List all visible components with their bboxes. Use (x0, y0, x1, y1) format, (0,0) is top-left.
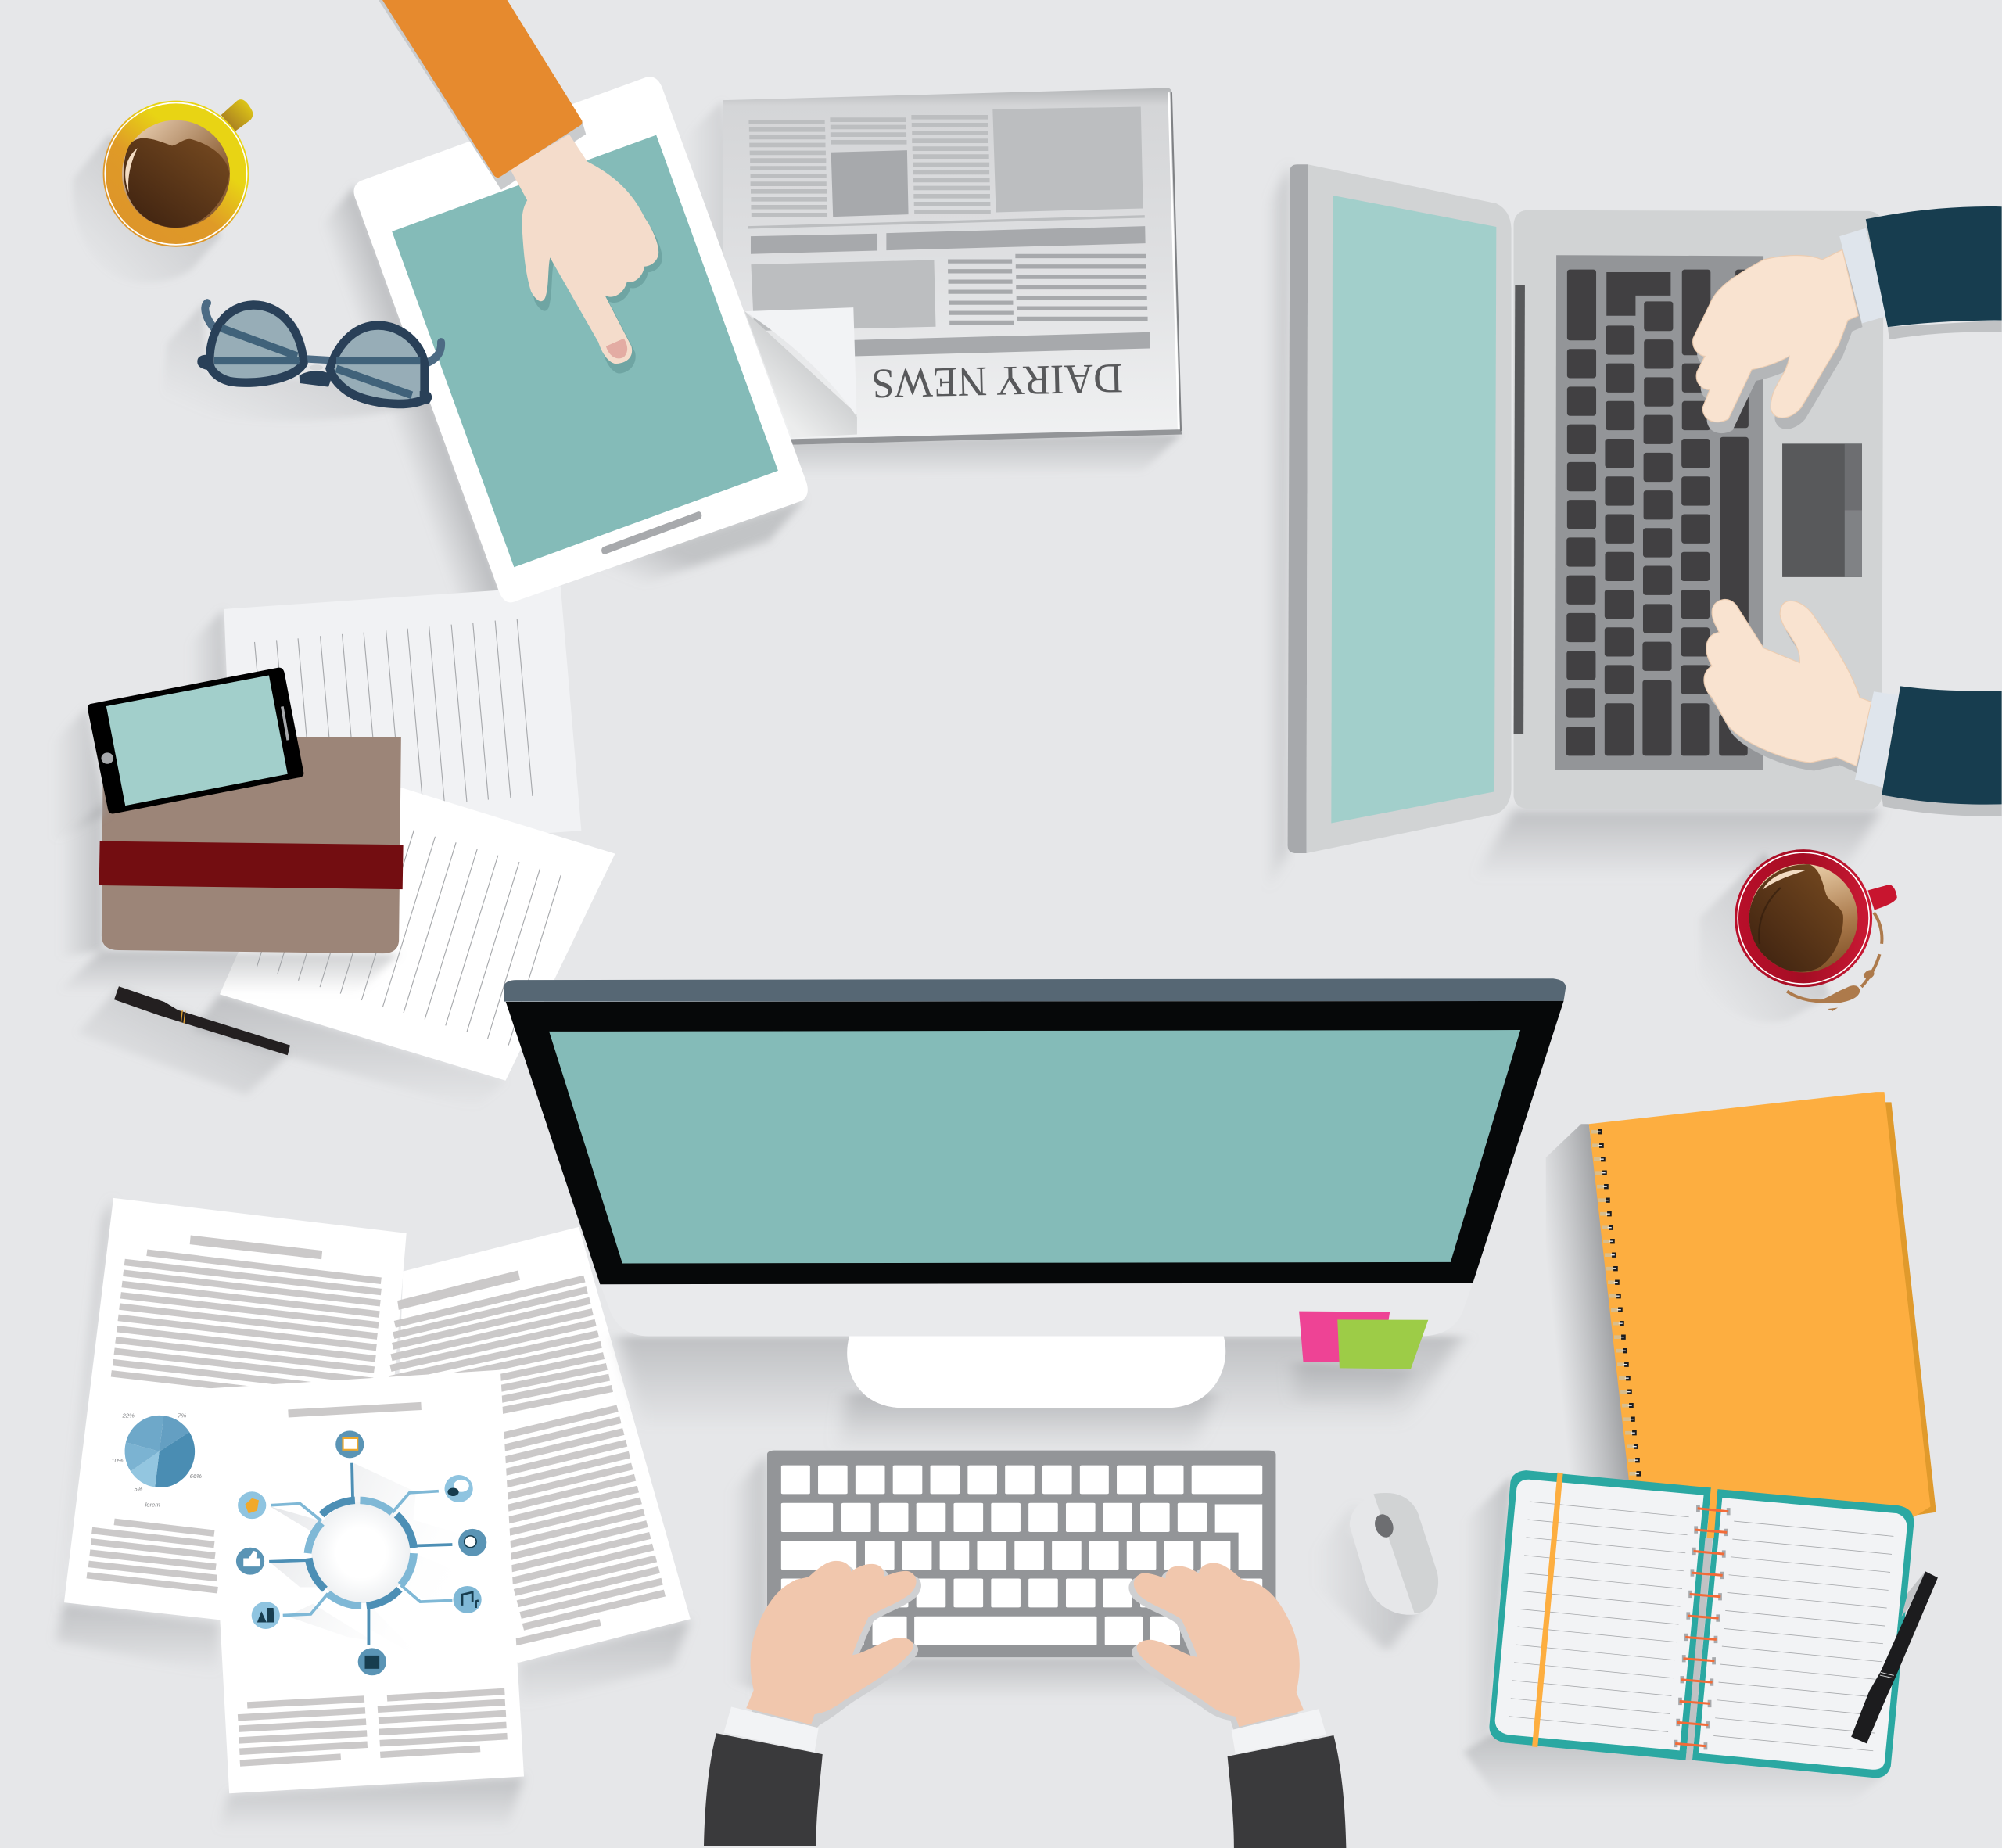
keyboard tray (1555, 255, 1763, 770)
bottom hand (1704, 600, 1871, 766)
red coffee cup (1699, 849, 1897, 1022)
photo lower (751, 260, 936, 331)
left hand (746, 1561, 917, 1724)
top hand (1693, 249, 1858, 422)
icon: thumbs up (243, 1551, 260, 1566)
chart sheet shadow (217, 1776, 524, 1832)
pie labels: 66% (190, 1473, 202, 1480)
pie slice 10% (125, 1442, 160, 1471)
open ring notebook with pen (1464, 1470, 1938, 1804)
pie labels: 10% (111, 1457, 124, 1464)
rule (748, 217, 1145, 228)
sleeve shadow (379, 0, 586, 190)
mouse left half (1350, 1493, 1438, 1615)
bottom sleeve (1882, 686, 2002, 805)
headline bars (751, 226, 1146, 254)
crema highlight (122, 120, 230, 228)
laptop keys (1566, 270, 1749, 755)
top hand shadow (1697, 261, 1863, 433)
monitor stand (847, 1336, 1225, 1408)
hand shadow (514, 140, 662, 374)
article columns (748, 117, 991, 215)
folded corner top (744, 307, 856, 417)
left page (1495, 1480, 1704, 1750)
chin shadow (618, 1336, 1462, 1431)
chart sheet right column (378, 1692, 508, 1755)
document sheets with charts (56, 1198, 691, 1832)
icon: speech dark (447, 1487, 459, 1496)
laptop with typing hands (1267, 164, 2002, 893)
notebook shadow bottom (59, 950, 399, 994)
upper sheet lines (255, 619, 533, 819)
second sheet heading (397, 1271, 520, 1310)
hub (311, 1502, 411, 1603)
keys (781, 1466, 1262, 1645)
spine (1686, 1538, 1713, 1760)
base shadow (1473, 809, 1882, 879)
tablet body (354, 77, 808, 602)
phone shadow (52, 707, 106, 842)
folded corner underside (744, 311, 857, 438)
pen ring (181, 1010, 185, 1023)
cup handle (1867, 885, 1897, 910)
binding holes (1598, 1132, 1641, 1473)
pen shadow (1902, 1572, 1926, 1617)
right temple tip (425, 343, 441, 364)
phone body (88, 668, 303, 813)
chart sheet (208, 1370, 524, 1793)
home bar (605, 515, 698, 551)
orange sleeve (382, 0, 582, 178)
top bezel band (504, 978, 1566, 1002)
coffee stain ring (1787, 913, 1882, 1001)
chart sheet heading (288, 1402, 422, 1417)
right page lines (1713, 1521, 1893, 1751)
desktop monitor (504, 978, 1566, 1453)
top sleeve (1866, 206, 2002, 327)
elastic band (1532, 1473, 1563, 1747)
sheet shadow bottom (56, 1602, 218, 1674)
light connectors (271, 1491, 452, 1616)
left temple tip (205, 303, 215, 329)
newspaper sheet (723, 88, 1182, 445)
icon: puzzle (245, 1498, 259, 1513)
notebook shadow bottom (1464, 1734, 1885, 1804)
newspaper edge (790, 429, 1182, 445)
dark connectors (269, 1463, 452, 1645)
laptop screen (1331, 196, 1496, 824)
phone speaker (282, 706, 288, 740)
text sheet heading (190, 1236, 322, 1259)
phone button (101, 752, 113, 764)
laptop base (1514, 210, 1884, 809)
pen shadow (77, 987, 290, 1095)
binding loops tan (1591, 1132, 1636, 1473)
upper sheet shadow (188, 609, 230, 777)
right hand (1134, 1563, 1304, 1727)
pie slice 5% (131, 1451, 160, 1487)
pen band (1880, 1672, 1894, 1678)
coffee stain blobs (1817, 970, 1874, 1011)
yellow coffee cup (73, 99, 253, 282)
lower sheet lines (257, 797, 561, 1046)
pie labels: 22% (122, 1412, 135, 1419)
scroll wheel (1373, 1514, 1395, 1538)
temples seen through lenses (214, 328, 420, 395)
upper ruled sheet (224, 586, 581, 833)
text sheet lines (111, 1253, 381, 1403)
notebook shadow left (1464, 1476, 1512, 1752)
right page (1699, 1498, 1907, 1770)
light arcs (308, 1500, 414, 1606)
newspaper (685, 88, 1182, 477)
sheet shadow left (56, 1198, 113, 1624)
phone (88, 668, 303, 813)
left hand shadow (752, 1565, 921, 1728)
page highlight (1169, 92, 1179, 429)
pie chart (111, 1412, 202, 1508)
tablet cast shadow (318, 187, 806, 638)
left page lines (1509, 1502, 1689, 1731)
cup body (1735, 849, 1872, 987)
pie slice 66% (155, 1432, 195, 1487)
notebook back cover (1885, 1102, 1936, 1516)
pie slice 7% (160, 1416, 189, 1451)
cup shadow (1699, 852, 1830, 1022)
monitor screen (549, 1030, 1520, 1263)
pen (1851, 1571, 1938, 1743)
pie labels: 5% (134, 1486, 143, 1493)
lid edge (1288, 164, 1308, 853)
left cuff (724, 1706, 819, 1752)
bottom hand shadow (1708, 608, 1875, 774)
notebook front cover (1589, 1092, 1930, 1517)
tablet shadow left (318, 187, 503, 638)
coffee (124, 138, 229, 228)
pie labels: lorem (145, 1501, 160, 1508)
rings (1675, 1509, 1728, 1746)
cup shadow (73, 134, 221, 282)
lower sheet shadow (192, 994, 505, 1109)
brown notebook (102, 737, 401, 953)
ring ends (1676, 1505, 1728, 1749)
left lens (210, 305, 303, 382)
trackpad (1782, 443, 1862, 577)
nose gap (310, 364, 323, 371)
left cover (1489, 1470, 1711, 1760)
icon: calendar (364, 1656, 379, 1669)
crema (1749, 864, 1857, 972)
pen barrel (1851, 1571, 1938, 1743)
pen body (114, 986, 290, 1055)
sticky shadow (1295, 1362, 1414, 1411)
pointing hand (510, 135, 658, 364)
icon discs (236, 1430, 486, 1675)
tablet shadow bottom (500, 498, 806, 615)
coffee ring inside (1759, 888, 1781, 944)
dark arcs (309, 1500, 414, 1606)
second sheet lines (384, 1279, 665, 1652)
photo small (831, 150, 909, 217)
pie labels (111, 1412, 202, 1508)
icon: chess pawns (257, 1608, 274, 1623)
keyboard and typing hands (704, 1451, 1438, 1848)
second sheet (390, 1227, 691, 1663)
photo large (992, 106, 1143, 212)
cup rim (105, 102, 247, 245)
bridge bottom (300, 371, 332, 387)
masthead bar (855, 332, 1150, 356)
mouse (1350, 1493, 1438, 1615)
mouse right half (1373, 1493, 1438, 1613)
right lens (330, 325, 425, 404)
chart sheet left column (238, 1699, 368, 1764)
lid shadow (1267, 165, 1290, 893)
fingernail (606, 339, 627, 358)
mouse shadow (1315, 1502, 1417, 1652)
right hand shadow (1128, 1567, 1299, 1731)
keyboard body (767, 1451, 1275, 1657)
icon: profile (465, 1536, 476, 1548)
binding wire highlights (1597, 1132, 1639, 1473)
coffee glint (1763, 870, 1805, 889)
notebook shadow left (59, 802, 102, 957)
long shadows (270, 1463, 480, 1666)
cup rim (1738, 852, 1869, 984)
icon: book (343, 1438, 357, 1450)
right sleeve (1228, 1735, 1346, 1848)
bottom cuff (1855, 691, 1899, 788)
keyboard shadow bottom (754, 1657, 1275, 1701)
trackpad lower strip (1845, 510, 1862, 577)
icon: speech bubbles (454, 1480, 469, 1492)
phone screen (106, 675, 288, 806)
newspaper shadow bottom (754, 434, 1182, 477)
cup handle (221, 99, 253, 131)
lower columns (948, 256, 1148, 322)
hinge (1514, 285, 1525, 734)
left paper stack with notebook and phone (52, 586, 615, 1109)
glasses (162, 303, 441, 421)
bridge top (307, 359, 331, 361)
orange spiral notebook (1546, 1092, 1936, 1517)
notebook shadow (1546, 1124, 1632, 1487)
bottom sleeve shadow (1882, 795, 2002, 816)
masthead: DAIRY NEWS: DAIRY NEWS (871, 355, 1124, 407)
cup body (103, 101, 249, 247)
text sheet lower lines (87, 1522, 217, 1590)
pie labels: 7% (178, 1412, 187, 1419)
second sheet shadow (518, 1619, 691, 1707)
tablet screen (392, 135, 778, 567)
bookmark in spine (1707, 1488, 1717, 1538)
trackpad upper strip (1845, 443, 1862, 510)
lower ruled sheet (220, 763, 615, 1081)
black bezel (506, 1001, 1564, 1284)
left sleeve (704, 1733, 823, 1846)
keyboard shadow left (731, 1453, 769, 1693)
glasses shadow (162, 303, 430, 421)
right cuff (1232, 1709, 1326, 1754)
lid panel (1307, 164, 1512, 853)
coffee (1749, 864, 1843, 972)
tablet with pointing hand (354, 0, 808, 602)
newspaper shadow left (685, 100, 754, 318)
right cover (1692, 1489, 1914, 1778)
radial diagram (236, 1430, 486, 1675)
pie slice 22% (126, 1416, 163, 1451)
monitor chin (600, 1283, 1473, 1336)
black pen (114, 986, 290, 1055)
top sleeve shadow (1888, 320, 2002, 339)
coffee glint (125, 148, 138, 192)
top cuff (1839, 228, 1888, 323)
right hand group (1128, 1563, 1346, 1848)
red band (99, 841, 404, 889)
pink sticky note (1299, 1312, 1390, 1362)
newspaper spine (1171, 92, 1181, 431)
text sheet (64, 1198, 407, 1637)
stand shadow (838, 1393, 1214, 1453)
frame lugs (197, 355, 432, 405)
green sticky note (1337, 1319, 1428, 1369)
icon: music notes (462, 1592, 479, 1608)
